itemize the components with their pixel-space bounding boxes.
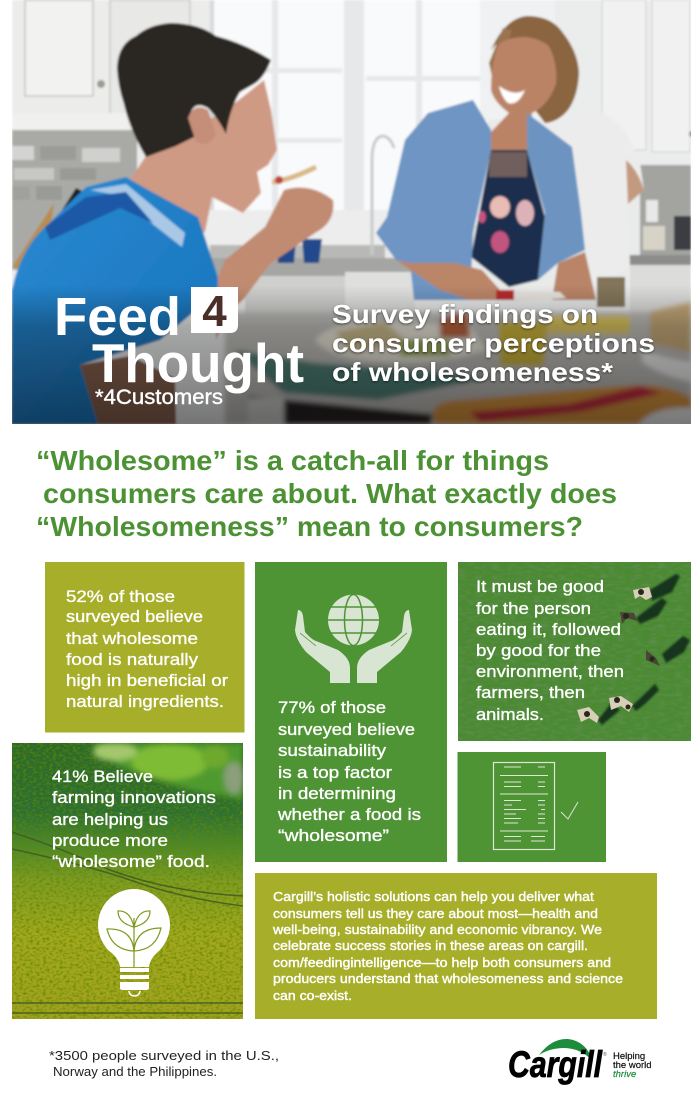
hero subtitle: Survey findings on [332,299,598,329]
logo: Feed 4 Thought: Feed [54,287,181,347]
hero subtitle: of wholesomeness* [332,357,614,387]
logo: Cargill: Helping [613,1051,645,1062]
hero: counter and food [225,302,691,424]
panel: 52% natural ingredients [45,562,244,732]
panel: 77% sustainability: surveyed believe [278,720,415,739]
hero: dark lower gradient [12,285,691,424]
panel: 77% sustainability: “wholesome” [278,826,389,845]
panel: cows in field: environment, then [476,662,624,681]
hero: boy [12,23,333,424]
panel: farming innovations: farming innovations [52,788,216,807]
boy: arm and hand [216,188,333,340]
hero background: right cabinets [602,0,691,152]
panel: 52% natural ingredients: high in beneficial or [66,671,228,690]
logo: Feed 4 Thought: Thought [92,332,304,394]
footnote: Norway and the Philippines. [53,1064,217,1079]
panel: 52% natural ingredients: food is naturally [66,650,199,669]
panel: farming innovations: produce more [52,831,168,850]
panel: 52% natural ingredients: natural ingredients. [66,692,224,711]
woman: arms and hands [396,260,509,300]
cows and shadows [577,574,690,725]
logo: Cargill: the world [613,1060,652,1071]
panel: Cargill holistic solutions: well-being, sustainability and economic vibrancy. We [272,922,602,937]
woman: top [471,150,545,287]
panel: farming innovations [12,743,244,1019]
panel: Cargill holistic solutions: can co-exist. [273,988,352,1003]
panel: Cargill holistic solutions: producers understand that wholesomeness and science [273,971,623,986]
logo: Feed 4 Thought: *4Customers [95,386,223,409]
main heading: “Wholesomeness” mean to consumers? [36,511,583,542]
logo: Cargill: thrive [613,1069,636,1080]
icon: check mark [561,802,578,819]
panel: cows in field: for the person [476,599,591,618]
panel: nutrition label [458,752,606,862]
icon: nutrition label document [494,762,554,850]
panel: farming innovations: are helping us [52,810,168,829]
logo: green swoosh [539,1039,593,1061]
icon: hands holding globe [295,594,412,683]
panel: 77% sustainability: is a top factor [278,763,392,782]
panel: 52% natural ingredients: surveyed believe [66,607,203,626]
panel: 52% natural ingredients: that wholesome [66,629,198,648]
panel: 77% sustainability: sustainability [278,741,387,760]
hero background: window [210,0,488,224]
hero subtitle: consumer perceptions [332,328,655,358]
icon: light bulb with plant [98,889,170,996]
woman: denim shirt [376,100,491,300]
panel: cows in field: by good for the [476,641,601,660]
panel: Cargill holistic solutions: celebrate success stories in these areas on cargill. [273,938,588,953]
panel: cows in field: farmers, then [476,683,585,702]
main heading: consumers care about. What exactly does [43,478,617,509]
woman: hair [491,16,579,123]
panel: Cargill holistic solutions: consumers tell us they care about most—health and [273,906,598,921]
hero photo: kitchen scene [12,0,695,424]
boy: blue shirt [12,177,218,424]
panel: cows in field: animals. [476,705,544,724]
boy: face and neck [130,80,277,240]
hero: man in white shirt behind [596,148,645,308]
panel: farming innovations: “wholesome” food. [52,852,210,871]
panel: Cargill holistic solutions [255,873,657,1019]
hero background: left cabinets [24,0,210,112]
logo: Cargill: Cargill [508,1044,603,1085]
hero background: tile wall [12,130,691,270]
tree canopy [92,743,244,800]
panel: cows in field: eating it, followed [476,620,621,639]
logo badge: 4: 4 [202,287,227,336]
panel: Cargill holistic solutions: com/feedingintelligence—to help both consumers and [273,955,611,970]
panel: cows in field [458,562,691,741]
woman: face and neck [491,37,556,154]
field tracks [12,832,243,1013]
hero: woman [376,16,596,302]
panel: Cargill holistic solutions: Cargill’s holistic solutions can help you deliver what [273,889,594,904]
footnote: *3500 people surveyed in the U.S., [49,1048,279,1063]
hero subtitle [332,299,655,387]
logo: Cargill: ® [603,1051,607,1058]
boy: hair [117,23,271,157]
hero background: sink and counter [200,136,691,332]
panel: 52% natural ingredients: 52% of those [66,587,175,606]
main heading: “Wholesome” is a catch-all for things [36,445,549,476]
panel: 77% sustainability: in determining [278,784,396,803]
main heading [36,445,617,542]
panel: 77% sustainability [255,562,447,862]
panel: cows in field: It must be good [476,577,604,596]
panel: 77% sustainability: 77% of those [278,698,386,717]
logo badge: 4 [191,287,238,336]
panel: farming innovations: 41% Believe [52,767,153,786]
panel: 77% sustainability: whether a food is [277,805,421,824]
logo: Feed 4 Thought [54,287,304,409]
footnote [49,1048,279,1079]
